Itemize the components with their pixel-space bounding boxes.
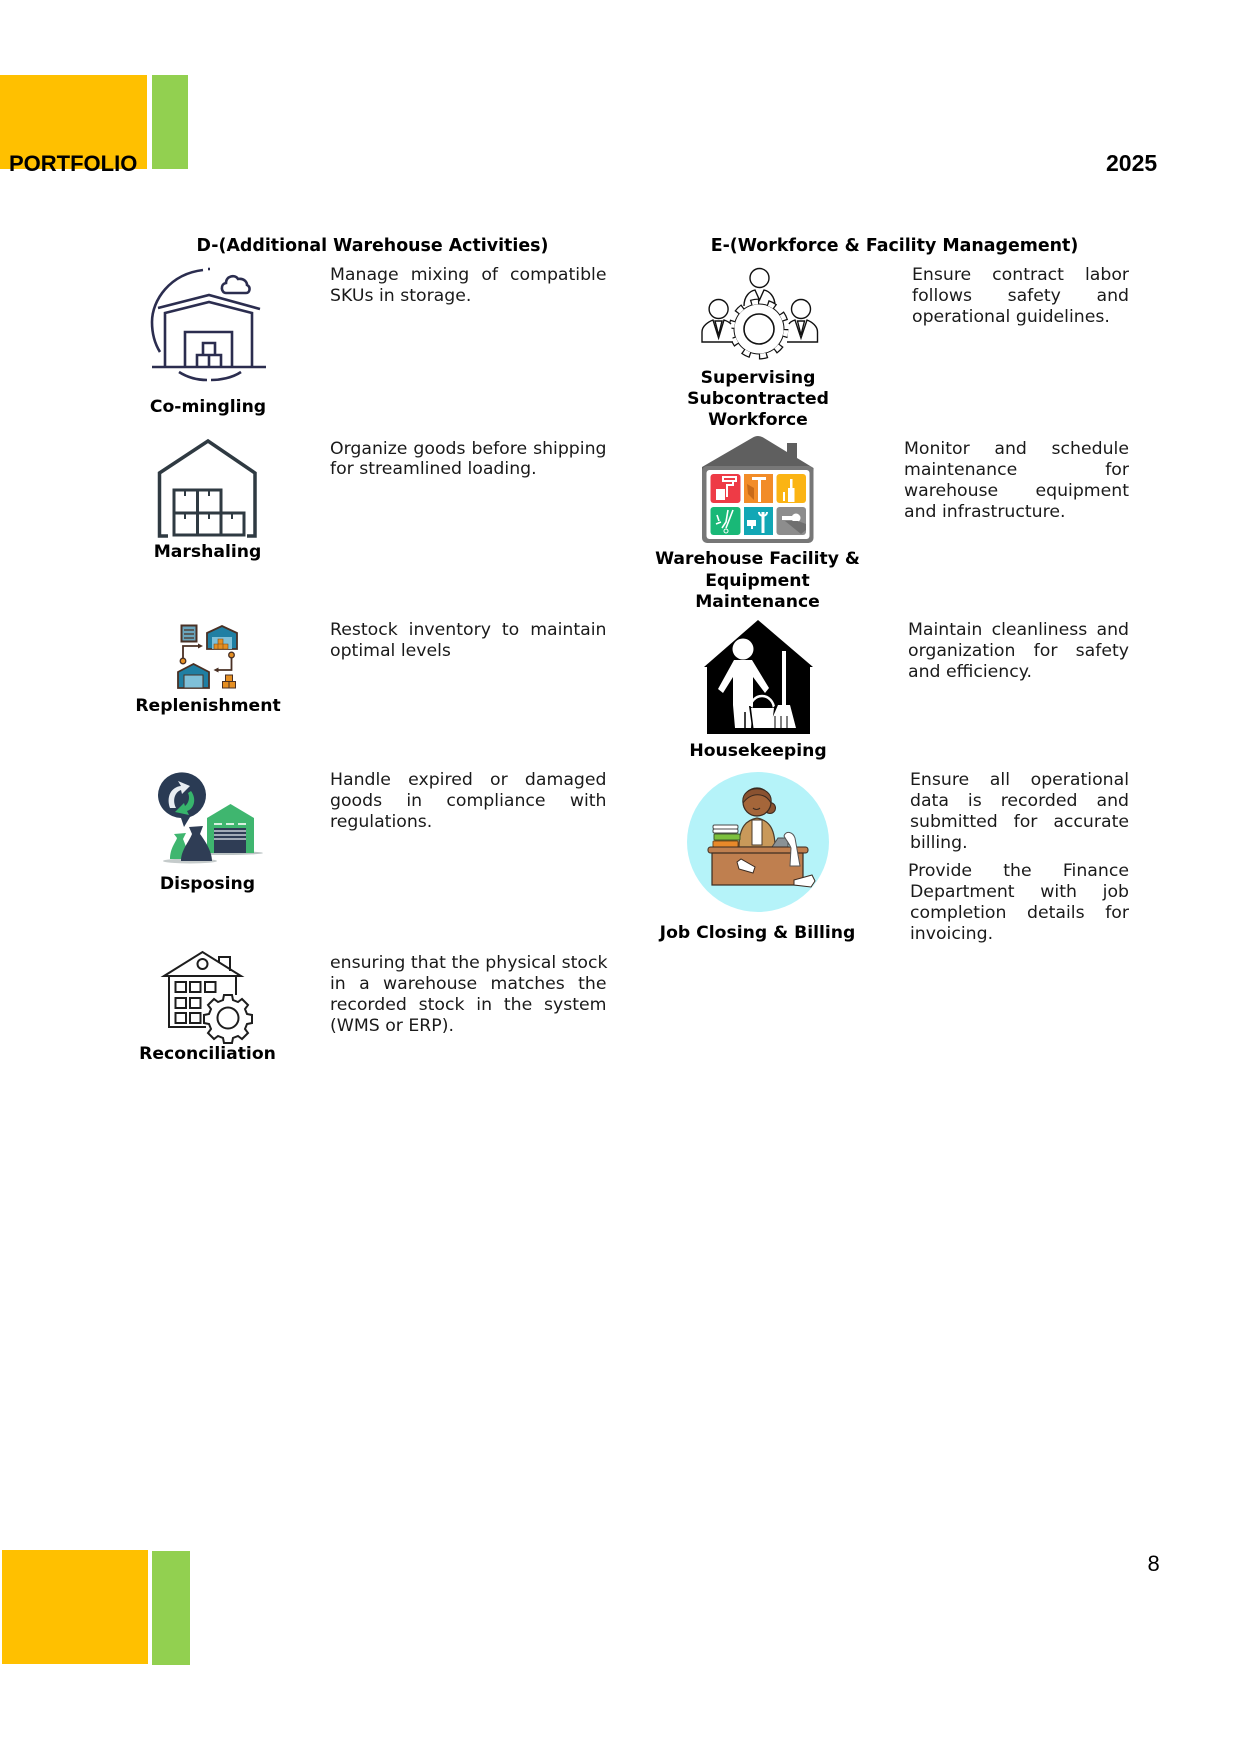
label: Co-mingling: Co-mingling <box>150 397 266 417</box>
label: Warehouse Facility and Equipment Maintenance <box>655 549 860 612</box>
icon: co-mingling warehouse <box>150 268 266 382</box>
icon: job closing and billing clerk <box>687 772 829 912</box>
icon: maintenance house with tools <box>702 436 814 543</box>
text: maintenance description: maintenance for <box>904 460 1129 480</box>
text: billing description part two: Provide the Finance <box>908 860 1129 880</box>
text: maintenance description: warehouse equipment <box>904 480 1129 500</box>
text: housekeeping description: and efficiency. <box>908 662 1032 682</box>
text: co-mingling description <box>330 264 606 306</box>
heading: section D: D-(Additional Warehouse Activities) <box>197 236 548 256</box>
text: disposing description <box>330 770 606 832</box>
label: Supervising Subcontracted Workforce: Supervising <box>701 368 815 388</box>
text: reconciliation description: (WMS or ERP). <box>330 1016 454 1036</box>
text: billing description part one: data is recorded and <box>910 790 1129 810</box>
text: billing description part one: Ensure all operational <box>910 770 1129 790</box>
text: billing description part two: completion details for <box>910 902 1129 922</box>
text: disposing description: regulations. <box>330 812 432 832</box>
heading: section E: E-(Workforce & Facility Management) <box>711 236 1078 256</box>
text: supervising description: Ensure contract labor <box>912 264 1129 284</box>
text: marshaling description: Organize goods before shipping <box>330 438 606 458</box>
icon: supervising team around gear <box>701 268 818 360</box>
text: housekeeping description: organization for safety <box>908 640 1129 660</box>
text: housekeeping description <box>908 620 1129 682</box>
label: Housekeeping: Housekeeping <box>689 741 827 761</box>
label: Warehouse Facility and Equipment Maintenance: Warehouse Facility & <box>655 549 860 569</box>
header label: PORTFOLIO: PORTFOLIO <box>9 150 137 176</box>
text: billing description part one <box>910 770 1129 852</box>
text: supervising description <box>912 264 1129 326</box>
text: billing description part two <box>908 860 1129 944</box>
panel: D additional warehouse activities <box>135 236 608 1064</box>
text: supervising description: follows safety and <box>912 286 1129 306</box>
text: disposing description: goods in compliance with <box>330 790 606 810</box>
text: replenishment description <box>330 620 606 660</box>
label: Supervising Subcontracted Workforce: Subcontracted <box>687 389 829 409</box>
label: Warehouse Facility and Equipment Maintenance: Equipment <box>705 571 810 591</box>
icon: reconciliation building and gear <box>160 950 253 1044</box>
label: Marshaling: Marshaling <box>154 542 261 562</box>
footer green block <box>152 1551 190 1665</box>
text: reconciliation description <box>330 952 608 1036</box>
text: maintenance description: Monitor and schedule <box>904 438 1129 458</box>
text: maintenance description <box>904 438 1129 522</box>
text: reconciliation description: ensuring that the physical stock <box>330 952 608 972</box>
text: co-mingling description: Manage mixing of compatible <box>330 264 606 284</box>
icon: housekeeping house <box>704 620 813 734</box>
header green block <box>152 75 188 169</box>
text: billing description part one: submitted for accurate <box>910 812 1129 832</box>
text: billing description part one: billing. <box>910 832 968 852</box>
header year: 2025 <box>1106 150 1157 176</box>
label: Disposing: Disposing <box>160 874 255 894</box>
label: Reconciliation: Reconciliation <box>139 1044 276 1064</box>
text: maintenance description: and infrastructure. <box>904 502 1065 522</box>
footer orange block <box>2 1550 148 1664</box>
label: Warehouse Facility and Equipment Maintenance: Maintenance <box>695 592 820 612</box>
panel: E workforce and facility management <box>655 236 1129 944</box>
label: Supervising Subcontracted Workforce: Workforce <box>708 410 808 430</box>
icon: replenishment flow <box>177 624 238 689</box>
text: disposing description: Handle expired or damaged <box>330 770 606 790</box>
icon: disposing bags and warehouse <box>158 772 263 864</box>
icon: marshaling warehouse <box>158 438 257 538</box>
text: replenishment description: Restock inventory to maintain <box>330 620 606 640</box>
text: billing description part two: invoicing. <box>910 924 993 944</box>
header orange block <box>0 75 147 169</box>
label: Replenishment: Replenishment <box>135 696 281 716</box>
text: supervising description: operational guidelines. <box>912 306 1110 326</box>
text: marshaling description: for streamlined loading. <box>330 458 537 478</box>
text: housekeeping description: Maintain cleanliness and <box>908 620 1129 640</box>
label: Job Closing and Billing: Job Closing & Billing <box>660 923 855 943</box>
text: marshaling description <box>330 438 606 478</box>
text: reconciliation description: recorded stock in the system <box>330 994 606 1014</box>
page number: 8 <box>1148 1551 1160 1576</box>
text: co-mingling description: SKUs in storage. <box>330 286 471 306</box>
text: reconciliation description: in a warehouse matches the <box>330 974 606 994</box>
label: Supervising Subcontracted Workforce <box>687 368 829 430</box>
text: replenishment description: optimal levels <box>330 640 451 660</box>
text: billing description part two: Department with job <box>910 882 1129 902</box>
